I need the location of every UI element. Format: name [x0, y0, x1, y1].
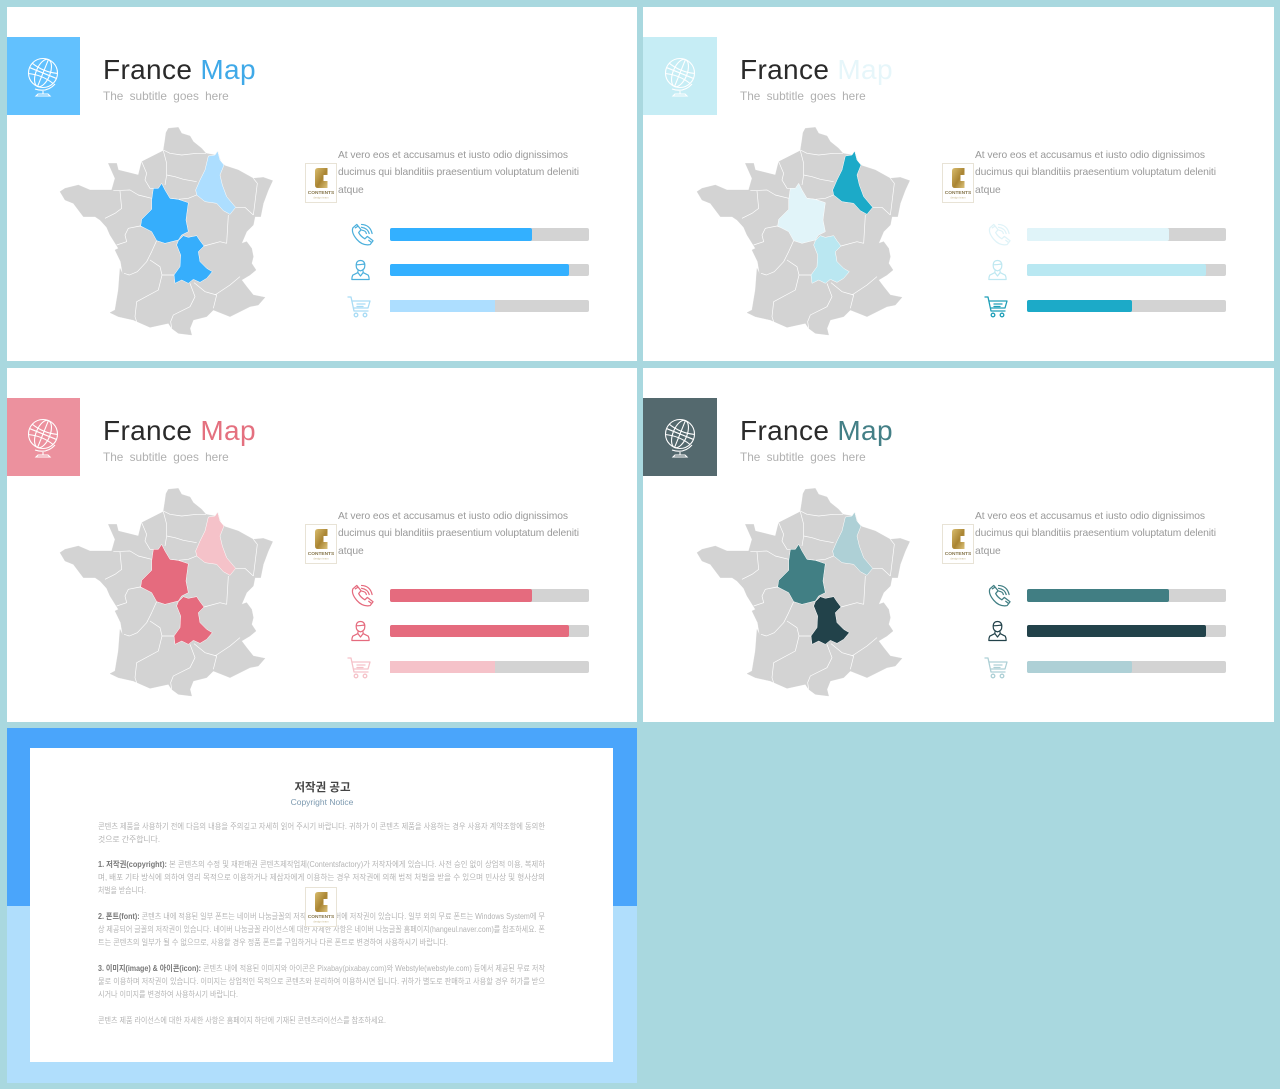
notice body text: 것으로 간주합니다. — [98, 834, 160, 844]
bar: person — [1027, 625, 1226, 637]
logo badge — [942, 524, 974, 564]
bar: person — [1027, 264, 1226, 276]
icon: cart — [348, 297, 370, 317]
notice body text: 3. 이미지(image) & 아이콘(icon): 콘텐츠 내에 적용된 이미지와 아이콘은 Pixabay(pixabay.com)와 Webstyle(webstyle.com) 등에서 제공된 무료 저작 — [98, 963, 546, 973]
logo badge — [942, 164, 974, 202]
subtitle: The subtitle goes here — [740, 450, 866, 464]
body paragraph: At vero eos et accusamus et iusto odio dignissimos — [338, 150, 568, 161]
notice body text: 처벌을 받습니다. — [98, 885, 146, 895]
map of France with highlighted regions — [60, 488, 273, 696]
body paragraph — [338, 150, 579, 196]
panel: copyright notice — [7, 728, 637, 1083]
bar: person — [390, 625, 589, 637]
logo badge — [306, 888, 336, 926]
title: France Map — [740, 54, 893, 85]
notice body text: 물로 이용하며 저작권이 있습니다. 이미지는 상업적인 목적으로 콘텐츠와 분리하여 이용하시면 됩니다. 귀하가 별도로 판매하고 사용할 경우 허가를 받으 — [98, 976, 545, 986]
icon: person — [989, 260, 1006, 280]
body paragraph: atque — [338, 546, 364, 557]
icon: phone — [352, 585, 373, 606]
body paragraph — [338, 511, 579, 557]
body paragraph: ducimus qui blanditiis praesentium voluptatum deleniti — [975, 167, 1216, 178]
body paragraph: atque — [338, 185, 364, 196]
notice body text: 며, 배포 기타 방식에 의하여 영리 목적으로 이용하거나 제삼자에게 이용하는 경우 저작권에 의해 법적 처벌을 받을 수 있으며 민사상 및 형사상의 — [98, 872, 545, 882]
icon: globe on pale cyan square — [643, 37, 717, 115]
icon: phone — [989, 224, 1010, 245]
map of France with highlighted regions — [697, 488, 910, 696]
notice body text: 트는 콘텐츠의 일부가 될 수 없으므로, 사용할 경우 정품 폰트를 구입하거나 다른 폰트로 변경하여 사용하시기 바랍니다. — [98, 937, 448, 947]
notice body text: 2. 폰트(font): 콘텐츠 내에 적용된 일부 폰트는 네이버 나눔글꼴의 저작권은 네이버에 저작권이 있습니다. 일부 외의 무료 폰트는 Windows System에 무 — [98, 911, 545, 921]
body paragraph: At vero eos et accusamus et iusto odio dignissimos — [338, 511, 568, 522]
panel: teal France map slide — [643, 368, 1274, 722]
notice body text: 콘텐츠 제품을 사용하기 전에 다음의 내용을 주의깊고 자세히 읽어 주시기 바랍니다. 귀하가 이 콘텐츠 제품을 사용하는 경우 사용자 계약조항에 동의한 — [98, 821, 546, 831]
body paragraph — [975, 511, 1216, 557]
body paragraph: atque — [975, 185, 1001, 196]
notice body text: 1. 저작권(copyright): 본 콘텐츠의 수정 및 재판매권 콘텐츠제작업체(Contentsfactory)가 저작자에게 있습니다. 사전 승인 없이 상업적 이용, 복제하 — [98, 859, 546, 869]
bar: cart — [390, 661, 589, 673]
notice body text: 콘텐츠 제품 라이선스에 대한 자세한 사항은 홈페이지 하단에 기재된 콘텐츠라이선스를 참조하세요. — [98, 1015, 386, 1025]
body paragraph: ducimus qui blanditiis praesentium voluptatum deleniti — [338, 528, 579, 539]
notice body text: 상 제공되어 글꼴의 저작권이 있습니다. 네이버 나눔글꼴 라이선스에 대한 자세한 사항은 네이버 나눔글꼴 홈페이지(hangeul.naver.com)를 참조하세요. 폰 — [98, 924, 545, 934]
icon: globe on slate square — [643, 398, 717, 476]
body paragraph: At vero eos et accusamus et iusto odio dignissimos — [975, 150, 1205, 161]
panel: blue France map slide — [7, 7, 637, 361]
icon: globe on pink square — [7, 398, 80, 476]
bar: cart — [1027, 661, 1226, 673]
notice body text: 시거나 이미지를 변경하여 사용하시기 바랍니다. — [98, 989, 238, 999]
logo badge — [306, 164, 336, 202]
map of France with highlighted regions — [60, 127, 273, 335]
panel: pink France map slide — [7, 368, 637, 722]
bar: person — [390, 264, 589, 276]
icon: phone — [352, 224, 373, 245]
body paragraph: ducimus qui blanditiis praesentium voluptatum deleniti — [975, 528, 1216, 539]
body paragraph — [975, 150, 1216, 196]
title: France Map — [103, 415, 256, 446]
icon: cart — [985, 297, 1007, 317]
subtitle: The subtitle goes here — [103, 89, 229, 103]
panel: cyan France map slide — [643, 7, 1274, 361]
icon: cart — [985, 658, 1007, 678]
subtitle: The subtitle goes here — [740, 89, 866, 103]
icon: person — [352, 622, 369, 640]
body paragraph: atque — [975, 546, 1001, 557]
icon: cart — [348, 658, 370, 678]
bar: cart — [1027, 300, 1226, 312]
bar: phone — [1027, 589, 1226, 602]
title: France Map — [103, 54, 256, 85]
subheading: Copyright Notice — [291, 797, 354, 807]
body paragraph: ducimus qui blanditiis praesentium voluptatum deleniti — [338, 167, 579, 178]
icon: person — [989, 622, 1006, 640]
logo badge — [306, 524, 336, 564]
bar: cart — [390, 300, 589, 312]
title: France Map — [740, 415, 893, 446]
bar: phone — [390, 589, 589, 602]
heading: copyright notice: 저작권 공고 — [294, 780, 351, 794]
notice body text — [98, 821, 546, 1025]
body paragraph: At vero eos et accusamus et iusto odio dignissimos — [975, 511, 1205, 522]
subtitle: The subtitle goes here — [103, 450, 229, 464]
bar: phone — [390, 228, 589, 241]
icon: globe on blue square — [7, 37, 80, 115]
icon: phone — [989, 585, 1010, 606]
map of France with highlighted regions — [697, 127, 910, 335]
bar: phone — [1027, 228, 1226, 241]
icon: person — [352, 260, 369, 280]
